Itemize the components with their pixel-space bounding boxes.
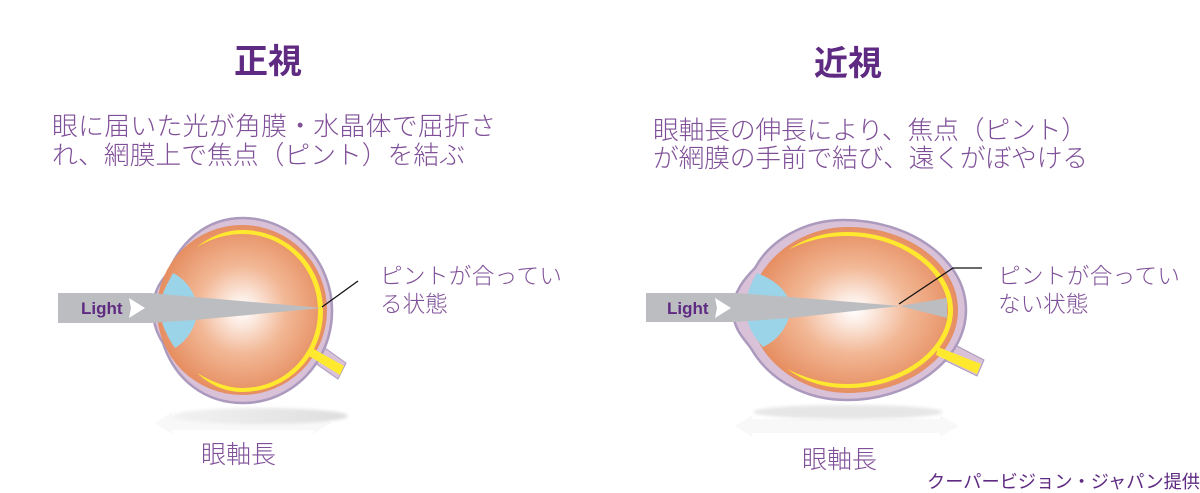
optic nerve sheath xyxy=(308,343,346,379)
text: 近視 description xyxy=(653,116,1088,173)
arrow: light direction xyxy=(715,298,731,318)
arrow: light direction xyxy=(129,298,145,318)
eye: 正視 xyxy=(58,218,346,403)
retina xyxy=(197,230,323,392)
optic nerve fibre xyxy=(309,348,344,375)
label: ピントが合っていない状態: ピントが合ってい xyxy=(998,264,1180,289)
retina xyxy=(787,232,953,388)
credit: クーパービジョン・ジャパン提供 xyxy=(927,472,1200,492)
text: 正視 description: 眼に届いた光が角膜・水晶体で屈折さ xyxy=(52,112,496,141)
label: ピントが合っていない状態: ない状態 xyxy=(998,292,1088,317)
light beam xyxy=(58,293,322,323)
text: 眼軸長 right: 眼軸長 xyxy=(802,446,877,474)
text: 眼軸長 left: 眼軸長 xyxy=(201,441,276,469)
vitreous xyxy=(750,227,958,393)
text: 正視 description: れ、網膜上で焦点（ピント）を結ぶ xyxy=(52,141,465,170)
arrow: 正視 axial length shadow xyxy=(155,408,348,434)
arrow: 近視 axial length shadow xyxy=(735,405,959,437)
lens xyxy=(746,273,790,347)
sclera xyxy=(733,220,966,400)
label: Light: Light xyxy=(81,299,123,318)
leader line: 正視 xyxy=(322,281,358,307)
optic nerve fibre xyxy=(936,347,981,374)
label: Light: Light xyxy=(667,299,709,318)
text: 正視 description xyxy=(52,112,496,170)
sclera xyxy=(153,218,332,403)
label: ピントが合っている状態 xyxy=(380,264,562,317)
title: 近視: 近視 xyxy=(814,45,882,83)
vitreous xyxy=(157,225,327,395)
light beam xyxy=(646,293,947,322)
leader line: 近視 xyxy=(899,268,982,304)
text: 近視 description: が網膜の手前で結び、遠くがぼやける xyxy=(653,144,1088,173)
label: ピントが合っている状態: る状態 xyxy=(380,292,448,317)
eye: 近視 xyxy=(646,220,984,400)
lens xyxy=(160,273,197,348)
title: 正視: 正視 xyxy=(234,43,302,81)
optic nerve sheath xyxy=(940,345,984,376)
label: ピントが合っている状態: ピントが合ってい xyxy=(380,264,562,289)
text: 近視 description: 眼軸長の伸長により、焦点（ピント） xyxy=(653,116,1087,145)
label: ピントが合っていない状態 xyxy=(998,264,1180,317)
